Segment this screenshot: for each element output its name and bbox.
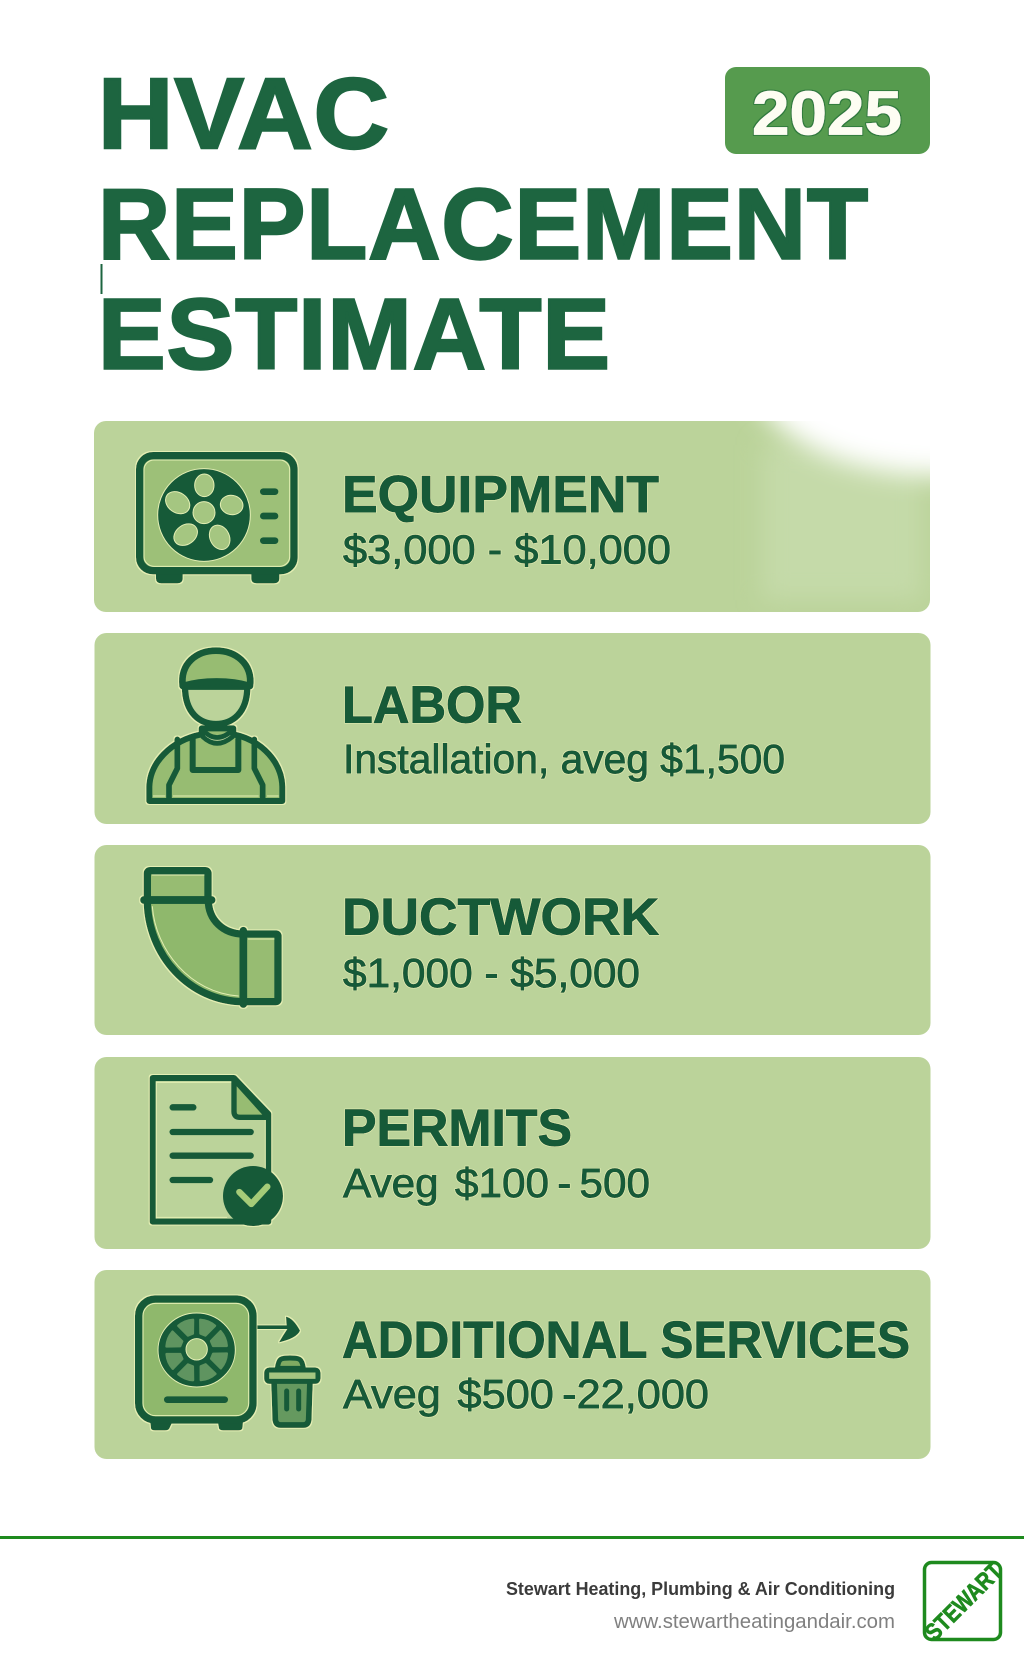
footer divider: [0, 1536, 1024, 1539]
price: $3,000 - $10,000: [343, 526, 671, 572]
panel: equipment: [94, 421, 930, 612]
panel background: [94, 421, 930, 612]
panel: labor: [94, 633, 930, 824]
panel background: [94, 1270, 930, 1459]
price: $1,000 - $5,000: [343, 950, 640, 996]
title: ESTIMATE: [98, 278, 611, 390]
heading: DUCTWORK: [342, 888, 659, 946]
title: HVAC: [98, 58, 390, 170]
panel: permits: [94, 1057, 930, 1249]
title: REPLACEMENT: [98, 168, 869, 280]
panel background: [94, 845, 930, 1035]
year badge: 2025: [752, 80, 902, 148]
icon: permit document: [153, 1078, 283, 1226]
icon: outdoor AC unit with fan: [140, 456, 294, 583]
panel: additional services: [94, 1270, 930, 1459]
panel: ductwork: [94, 845, 930, 1035]
trash can: [267, 1358, 318, 1425]
price: Aveg $500 -22,000: [343, 1371, 709, 1417]
heading: EQUIPMENT: [342, 466, 659, 524]
panel background: [94, 1057, 930, 1249]
removal arrow: [257, 1317, 300, 1342]
heading: LABOR: [342, 676, 522, 734]
price: Aveg $100 - 500: [343, 1160, 650, 1206]
panel background: [94, 633, 930, 824]
icon: duct elbow: [144, 871, 278, 1004]
heading: ADDITIONAL SERVICES: [342, 1312, 910, 1370]
price: Installation, aveg $1,500: [343, 736, 785, 782]
footer company name: Stewart Heating, Plumbing & Air Conditioning: [506, 1579, 895, 1599]
heading: PERMITS: [342, 1100, 572, 1158]
faded corner: [762, 445, 922, 600]
logo: STEWART: [920, 1558, 1008, 1646]
icon: old unit removal: [139, 1299, 318, 1430]
year badge: [725, 67, 930, 154]
title: [98, 58, 869, 390]
icon: worker: [149, 651, 282, 801]
footer website: www.stewartheatingandair.com: [613, 1611, 895, 1633]
